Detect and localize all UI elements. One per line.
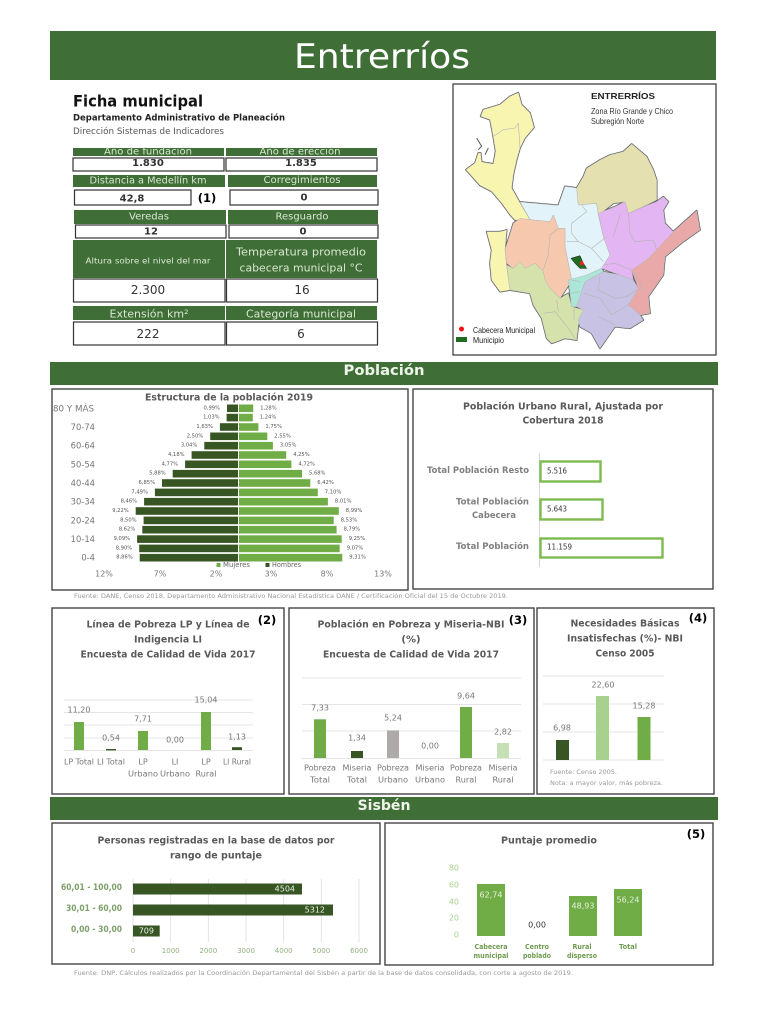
cell: extensión: Extensión km²	[110, 308, 188, 320]
bar: 60,01 - 100,00: 4504	[275, 884, 295, 894]
cell: veredas	[74, 210, 226, 238]
percent axis labels: 2%	[210, 570, 223, 578]
panel: municipal data table	[73, 146, 378, 345]
value axis labels: 5000	[312, 947, 330, 955]
category labels	[304, 764, 518, 784]
value labels: mujeres: 8,53%	[341, 517, 357, 523]
bar: total población: 11.159	[547, 542, 572, 552]
value labels: mujeres: 9,25%	[349, 536, 365, 542]
panel: personas registradas	[52, 823, 380, 964]
percent axis labels: 13%	[374, 570, 392, 578]
value labels: hombres: 8,90%	[116, 545, 132, 551]
value labels: 22,60	[592, 680, 614, 690]
panel: pobreza y miseria NBI	[289, 608, 534, 794]
value labels: hombres	[112, 405, 220, 561]
cell: temperatura promedio: 16	[294, 283, 310, 297]
percent axis labels: 12%	[95, 570, 113, 578]
category labels: Urbano	[160, 770, 190, 778]
value labels: 62,74	[480, 890, 502, 900]
chart title: Insatisfechas (%)- NBI	[567, 634, 683, 644]
value labels: 11,20	[68, 706, 90, 714]
section heading: Sisbén: Sisbén	[358, 798, 410, 814]
value labels: hombres: 1,03%	[203, 415, 220, 421]
panel: línea de pobreza	[52, 608, 284, 794]
heading: ficha municipal: Dirección Sistemas de Indicadores	[73, 126, 224, 137]
chart title	[98, 836, 335, 862]
value labels: mujeres: 1,28%	[260, 405, 277, 411]
cell: veredas: 12	[144, 226, 158, 238]
cell: extensión	[73, 306, 225, 345]
heading: ficha municipal	[73, 92, 285, 137]
category labels	[64, 758, 251, 778]
section heading: Población	[50, 362, 718, 385]
value labels: mujeres: 1,75%	[265, 424, 282, 430]
bar: 0,00 - 30,00	[71, 925, 160, 936]
note	[550, 768, 663, 787]
municipality marker	[571, 256, 587, 268]
value axis labels: 3000	[237, 947, 255, 955]
cell: distancia a Medellín	[73, 174, 225, 205]
panel: population pyramid	[52, 389, 408, 590]
value labels: hombres: 0,99%	[204, 405, 220, 411]
value labels: 56,24	[617, 896, 639, 904]
cell: temperatura promedio	[226, 240, 378, 302]
category labels: Miseria	[488, 764, 518, 772]
bar: total población resto	[427, 462, 600, 482]
chart title: Necesidades Básicas	[570, 618, 680, 630]
bar: total población	[456, 538, 662, 558]
category labels: Pobreza	[377, 764, 409, 772]
age axis labels: 40-44	[71, 478, 95, 488]
value labels: mujeres: 3,05%	[280, 443, 296, 449]
cell: año de erección: 1.835	[285, 158, 317, 169]
value labels: hombres: 9,09%	[114, 536, 130, 542]
value labels: hombres: 3,04%	[181, 443, 197, 449]
age axis labels: 60-64	[71, 441, 95, 451]
value labels: hombres: 8,46%	[121, 499, 137, 505]
cell: año de fundación: 1.830	[132, 158, 164, 169]
value labels: 0,00	[528, 920, 546, 930]
bay islets	[477, 138, 488, 155]
value labels: hombres: 4,77%	[162, 461, 178, 467]
note: Fuente: Censo 2005.	[550, 768, 617, 776]
category labels: Rural	[196, 770, 216, 778]
panel: map of Antioquia	[453, 84, 716, 355]
age axis labels: 30-34	[71, 497, 95, 507]
internal region lines	[493, 123, 657, 338]
value labels: 0,54	[102, 734, 120, 742]
map heading: Zona Río Grande y Chico	[591, 106, 673, 116]
chart title: rango de puntaje	[170, 850, 262, 862]
cell: veredas: Veredas	[129, 212, 169, 222]
map heading	[591, 91, 673, 126]
value labels: 0,00	[421, 742, 439, 750]
chart title	[567, 618, 683, 660]
bar: total población resto: 5.516	[547, 466, 567, 476]
bar: total población cabecera: 5.643	[547, 504, 567, 514]
value labels	[553, 680, 655, 732]
bars	[556, 696, 650, 760]
age axis labels: 0-4	[81, 553, 95, 563]
reference number: (5)	[687, 827, 705, 841]
reference number: (2)	[258, 613, 276, 627]
bar: 60,01 - 100,00: 60,01 - 100,00	[61, 883, 122, 893]
value axis labels: 0	[131, 947, 135, 955]
category labels	[474, 943, 637, 960]
value labels: 1,34	[348, 734, 366, 742]
cell: distancia a Medellín: 42,8	[120, 194, 144, 204]
age axis labels: 20-24	[71, 515, 95, 525]
chart title: Puntaje promedio	[501, 836, 597, 846]
cell: corregimientos: 0	[301, 192, 308, 204]
section heading: Sisbén	[50, 797, 718, 820]
chart title: Encuesta de Calidad de Vida 2017	[323, 650, 499, 660]
map heading: Subregión Norte	[591, 116, 644, 126]
cell: corregimientos	[228, 175, 378, 205]
map legend	[456, 325, 535, 345]
value labels: mujeres: 2,55%	[274, 433, 291, 439]
value labels: mujeres: 8,01%	[335, 499, 351, 505]
cell: categoría municipal	[226, 306, 378, 345]
chart title	[318, 618, 504, 660]
cell: temperatura promedio: Temperatura promedio	[235, 246, 366, 258]
category labels: municipal	[474, 952, 508, 960]
cell: año de fundación: Año de fundación	[104, 146, 192, 158]
value labels: 1,13	[228, 732, 246, 742]
value labels: mujeres: 1,24%	[260, 415, 276, 421]
value labels: 9,64	[457, 692, 475, 700]
category labels: Total	[309, 776, 330, 784]
title banner	[50, 31, 716, 80]
legend: Hombres	[272, 561, 301, 569]
category labels: LI	[172, 758, 178, 766]
value labels: 5,24	[384, 714, 402, 722]
value labels: mujeres: 7,10%	[325, 489, 341, 495]
value axis labels: 2000	[199, 947, 217, 955]
category labels: Urbano	[128, 770, 158, 778]
cell: altura sobre el nivel del mar	[73, 240, 225, 302]
age axis labels: 50-54	[71, 459, 95, 469]
value labels: hombres: 8,86%	[116, 555, 133, 561]
value labels: hombres: 7,49%	[131, 489, 148, 495]
cell: distancia a Medellín: (1)	[198, 191, 216, 205]
value labels	[311, 692, 512, 750]
cell: corregimientos: Corregimientos	[264, 175, 340, 186]
category labels: Rural	[572, 943, 592, 951]
cell: resguardo: 0	[300, 226, 307, 238]
value labels: mujeres: 9,07%	[347, 545, 363, 551]
bar: 30,01 - 60,00	[66, 904, 333, 916]
value labels: mujeres: 4,25%	[293, 452, 310, 458]
value axis labels: 40	[449, 898, 459, 906]
bar: total población cabecera: Cabecera	[472, 511, 516, 521]
bars	[477, 884, 642, 936]
panel: necesidades básicas insatisfechas	[537, 608, 714, 794]
value labels: 0,00	[166, 736, 184, 744]
bars	[74, 712, 242, 750]
value labels: hombres: 6,85%	[139, 480, 155, 486]
value labels: mujeres: 8,79%	[344, 527, 360, 533]
value labels	[480, 890, 639, 930]
category labels: Miseria	[342, 764, 372, 772]
bar: total población resto: Total Población Resto	[427, 465, 529, 476]
bar: 0,00 - 30,00: 709	[139, 926, 154, 936]
chart title: (%)	[401, 634, 421, 646]
age axis labels: 80 Y MÁS	[53, 402, 94, 413]
cell: año de erección	[226, 146, 377, 171]
chart title	[80, 618, 256, 660]
chart title: Cobertura 2018	[522, 416, 604, 426]
value labels: 6,98	[553, 724, 571, 732]
category labels: LI Rural	[223, 758, 251, 766]
heading: ficha municipal: Ficha municipal	[73, 92, 203, 110]
title banner: Entrerríos	[294, 37, 470, 77]
value labels: 48,93	[572, 902, 594, 910]
cell: extensión: 222	[137, 327, 159, 341]
chart title: Personas registradas en la base de datos por	[98, 836, 335, 846]
category labels: Urbano	[378, 776, 408, 784]
value labels: 15,28	[633, 702, 655, 710]
bar: total población cabecera: Total Población	[456, 496, 529, 508]
value labels: hombres: 5,88%	[149, 471, 166, 477]
age axis labels: 10-14	[71, 534, 95, 544]
category labels: Urbano	[415, 776, 445, 784]
value labels: hombres: 8,62%	[119, 527, 135, 533]
cell: altura sobre el nivel del mar: 2.300	[131, 283, 165, 297]
category labels: Pobreza	[450, 764, 482, 772]
age axis labels	[53, 402, 95, 563]
source note: población: Fuente: DANE, Censo 2018, Departamento Administrativo Nacional Estadística DANE / Certificación Oficial del 15 de Octubre 2019.	[74, 592, 508, 600]
chart title: Estructura de la población 2019	[145, 392, 313, 404]
value labels: hombres: 2,50%	[187, 433, 203, 439]
panel: puntaje promedio	[385, 823, 713, 965]
chart title: Indigencia LI	[134, 634, 202, 646]
bar: 0,00 - 30,00: 0,00 - 30,00	[71, 925, 122, 935]
category labels: LP	[138, 758, 148, 766]
category labels: Centro	[525, 943, 549, 951]
cell: año de erección: Año de erección	[260, 146, 340, 158]
value labels: mujeres	[260, 405, 366, 561]
chart title: Población en Pobreza y Miseria-NBI	[318, 618, 504, 630]
value labels: mujeres: 5,68%	[309, 471, 326, 477]
value labels: hombres: 9,22%	[112, 508, 129, 514]
category labels: Cabecera	[474, 943, 508, 951]
cell: año de fundación	[73, 146, 224, 171]
percent axis labels	[95, 570, 392, 578]
value labels: 15,04	[195, 696, 217, 704]
percent axis labels: 3%	[265, 570, 278, 578]
cell: temperatura promedio: cabecera municipal °C	[240, 262, 363, 274]
bar: 60,01 - 100,00	[61, 883, 302, 894]
section heading: Población: Población	[344, 363, 424, 379]
value labels: mujeres: 4,72%	[298, 461, 315, 467]
chart title: Población Urbano Rural, Ajustada por	[463, 400, 663, 412]
value labels: mujeres: 9,31%	[349, 555, 366, 561]
chart title	[463, 400, 663, 426]
cell: distancia a Medellín: Distancia a Medellín km	[90, 174, 206, 186]
chart title: Encuesta de Calidad de Vida 2017	[80, 650, 256, 660]
bars: mujeres	[239, 404, 342, 562]
heading: ficha municipal: Departamento Administrativo de Planeación	[73, 112, 285, 124]
percent axis labels: 7%	[154, 570, 167, 578]
chart title: Censo 2005	[596, 648, 655, 660]
age axis labels: 70-74	[71, 422, 95, 432]
category labels: Rural	[492, 776, 514, 784]
legend: Mujeres	[223, 561, 250, 569]
source note: Sisbén: Fuente: DNP, Cálculos realizados por la Coordinación Departamental del Sisbén a partir de la base de datos consolidada, con corte a agosto de 2019.	[74, 969, 573, 977]
category labels: LP Total	[64, 758, 94, 766]
bar: total población cabecera	[456, 496, 602, 521]
cell: resguardo	[228, 210, 378, 238]
value labels: hombres: 1,63%	[196, 424, 213, 430]
cell: resguardo: Resguardo	[276, 212, 328, 222]
value labels: 2,82	[494, 728, 512, 736]
map legend: Cabecera Municipal	[473, 325, 535, 335]
bars	[314, 707, 509, 758]
bar: total población: Total Población	[456, 541, 529, 552]
category labels: Miseria	[416, 764, 445, 772]
reference number: (3)	[509, 613, 527, 627]
category labels: LP	[201, 758, 211, 766]
value labels: 7,33	[311, 704, 329, 712]
map legend: Municipio	[473, 335, 504, 345]
value labels: hombres: 4,18%	[168, 452, 185, 458]
value axis labels: 6000	[350, 947, 368, 955]
category labels: Rural	[456, 776, 476, 784]
category labels: Pobreza	[304, 764, 336, 772]
value axis labels	[449, 864, 459, 940]
reference number: (4)	[689, 611, 707, 625]
value labels	[68, 696, 246, 744]
value labels: mujeres: 6,42%	[317, 480, 334, 486]
value axis labels: 20	[449, 914, 459, 922]
panel: población urbano rural	[413, 389, 713, 589]
bar: 30,01 - 60,00: 30,01 - 60,00	[66, 904, 122, 914]
cell: categoría municipal: Categoría municipal	[246, 308, 356, 320]
percent axis labels: 8%	[321, 570, 334, 578]
category labels: disperso	[567, 952, 597, 960]
cell: categoría municipal: 6	[297, 327, 305, 341]
value axis labels: 0	[454, 930, 459, 940]
bars: hombres	[136, 404, 238, 562]
legend	[216, 561, 301, 569]
category labels: Total	[619, 943, 637, 951]
value labels: 7,71	[134, 714, 152, 724]
category labels: poblado	[523, 952, 551, 960]
map heading: ENTRERRÍOS	[591, 91, 655, 101]
cell: altura sobre el nivel del mar: Altura sobre el nivel del mar	[86, 256, 212, 266]
bar: 30,01 - 60,00: 5312	[305, 906, 325, 914]
value axis labels: 80	[449, 864, 459, 872]
value labels: mujeres: 8,99%	[346, 508, 362, 514]
category labels: Total	[346, 776, 367, 784]
category labels: LI Total	[97, 758, 125, 766]
value axis labels: 60	[449, 880, 459, 890]
value axis labels: 4000	[275, 947, 293, 955]
value labels: hombres: 8,50%	[120, 517, 137, 523]
value axis labels	[131, 947, 368, 955]
chart title: Línea de Pobreza LP y Línea de	[86, 618, 250, 630]
note: Nota: a mayor valor, más pobreza.	[550, 779, 663, 787]
value axis labels: 1000	[162, 947, 180, 955]
